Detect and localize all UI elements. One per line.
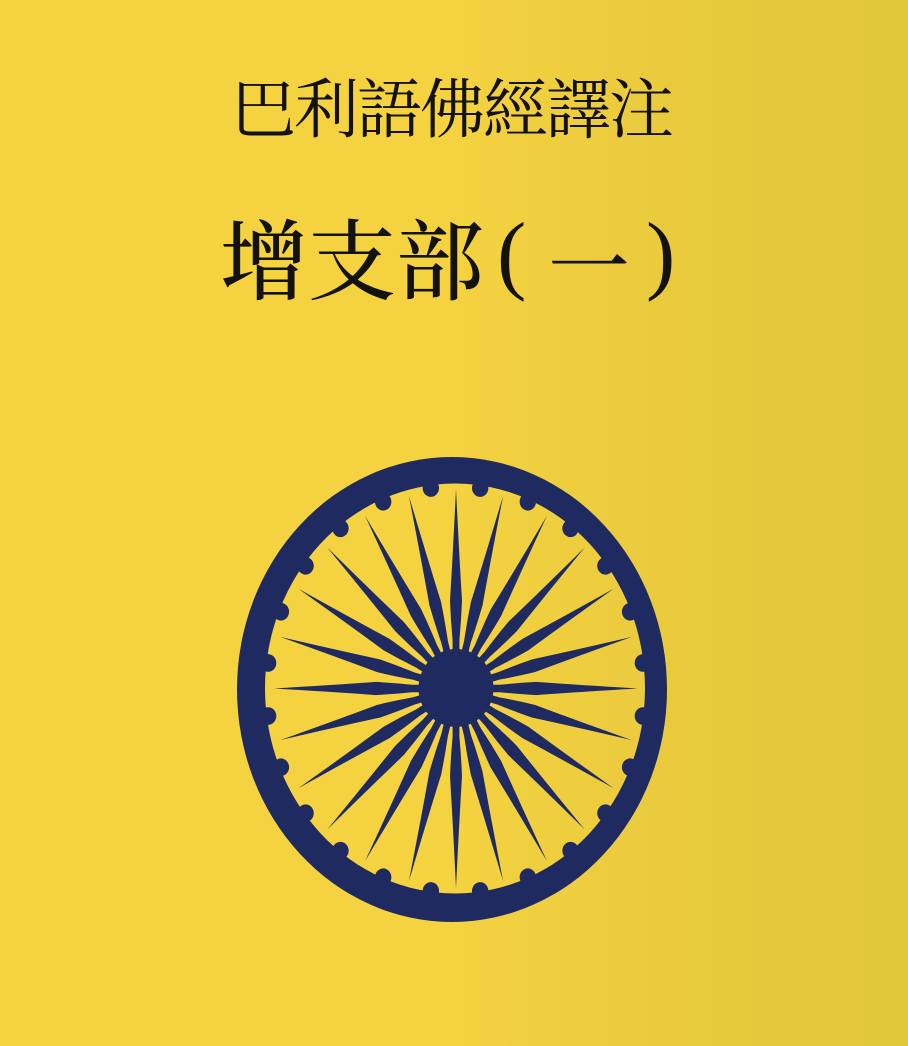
title: volume name: ): [646, 206, 675, 303]
title: series name: 巴利語佛經譯注: [231, 75, 672, 147]
wheel rim beads: [259, 478, 652, 901]
title: volume name: (: [497, 206, 526, 303]
title: volume name: [220, 206, 675, 314]
wheel spokes: [274, 489, 638, 888]
title: volume name: 增支部: [220, 216, 484, 313]
wheel rim: [237, 457, 667, 922]
title: volume name: 一: [548, 223, 630, 314]
wheel hub: [418, 649, 494, 727]
